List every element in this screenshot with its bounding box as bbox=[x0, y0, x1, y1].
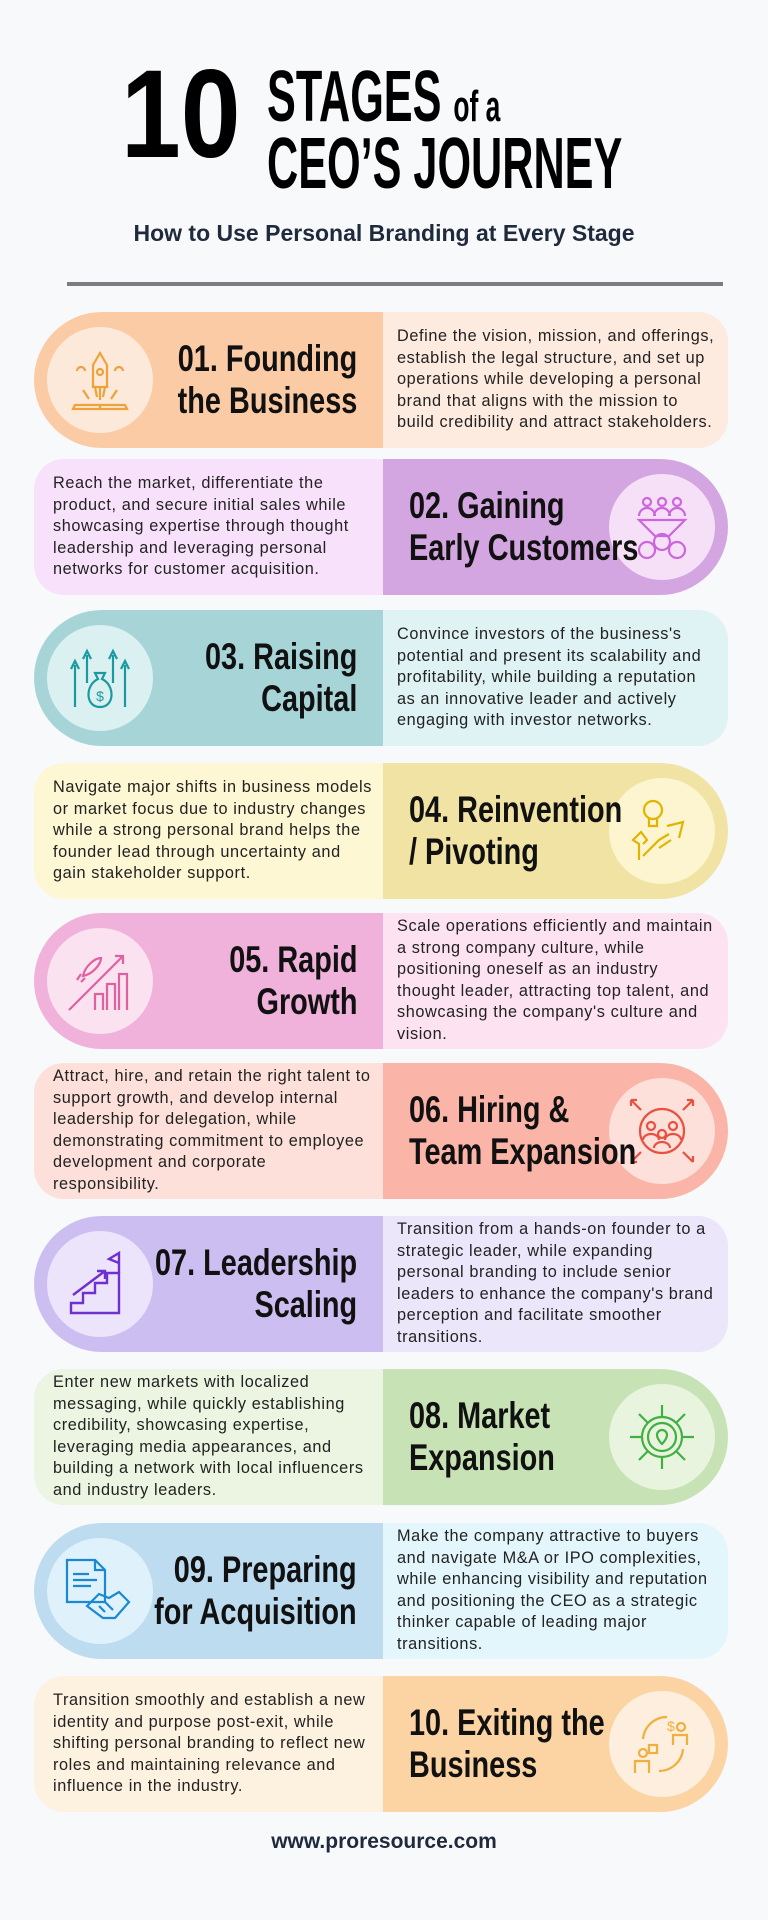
heading 07: Scaling bbox=[254, 1284, 357, 1325]
icon: rocket launch bbox=[47, 327, 153, 433]
heading 09: 09. Preparing bbox=[174, 1549, 357, 1590]
heading 10: 10. Exiting the bbox=[409, 1702, 605, 1743]
heading 05: Growth bbox=[256, 981, 357, 1022]
title line 1: STAGES of a bbox=[267, 57, 500, 137]
icon: exchange people: $ bbox=[667, 1718, 675, 1734]
text 07: Transition from a hands-on founder to a strategic leader, while expanding personal branding to include senior leaders to enhance the company's brand perception and facilitate smoother transitions. bbox=[397, 1220, 713, 1346]
panel: 05 rapid growth bbox=[34, 913, 728, 1049]
heading 05: 05. Rapid bbox=[229, 939, 357, 980]
heading 09: for Acquisition bbox=[154, 1591, 357, 1632]
panel: 04 reinvention bbox=[34, 763, 728, 899]
heading 01: 01. Founding bbox=[177, 338, 357, 379]
title number 10: 10 bbox=[121, 45, 241, 184]
icon: rocket growth chart bbox=[47, 928, 153, 1034]
icon: exchange people bbox=[609, 1691, 715, 1797]
panel: 03 raising capital bbox=[34, 610, 728, 746]
title bbox=[121, 45, 622, 204]
heading 06: Team Expansion bbox=[409, 1131, 636, 1172]
heading 02: Early Customers bbox=[409, 527, 638, 568]
heading 10: Business bbox=[409, 1744, 537, 1785]
heading 04 bbox=[409, 789, 622, 872]
title line 2: CEO’S JOURNEY bbox=[267, 124, 622, 204]
heading 09 bbox=[154, 1549, 357, 1632]
heading 01: the Business bbox=[177, 380, 357, 421]
subtitle: How to Use Personal Branding at Every Stage bbox=[133, 220, 635, 246]
heading 06: 06. Hiring & bbox=[409, 1089, 569, 1130]
icon: team expansion bbox=[609, 1078, 715, 1184]
heading 04: / Pivoting bbox=[409, 831, 539, 872]
text 10: Transition smoothly and establish a new identity and purpose post-exit, while shifting personal branding to reflect new roles and maintaining relevance and influence in the industry. bbox=[53, 1691, 365, 1795]
panel: 01 founding bbox=[34, 312, 728, 448]
icon: document handshake bbox=[47, 1538, 153, 1644]
panel: 09 acquisition bbox=[34, 1523, 728, 1659]
panel: 02 early customers bbox=[34, 459, 728, 595]
text 05: Scale operations efficiently and maintain a strong company culture, while positioning oneself as an industry thought leader, attracting top talent, and showcasing the company's culture and vision. bbox=[397, 917, 713, 1043]
heading 07 bbox=[155, 1242, 357, 1325]
icon: customer funnel bbox=[609, 474, 715, 580]
text 03: Convince investors of the business's potential and present its scalability and profitability, while building a reputation as an innovative leader and actively engaging with investor networks. bbox=[397, 625, 701, 729]
heading 02: 02. Gaining bbox=[409, 485, 565, 526]
icon: money bag arrows bbox=[47, 625, 153, 731]
text 01: Define the vision, mission, and offerings, establish the legal structure, and set up operations while developing a personal brand that aligns with the mission to build credibility and attract stakeholders. bbox=[397, 327, 714, 431]
icon: bulb pivot bbox=[609, 778, 715, 884]
heading 10 bbox=[409, 1702, 605, 1785]
text 02: Reach the market, differentiate the product, and secure initial sales while showcasing expertise through thought leadership and leveraging personal networks for customer acquisition. bbox=[53, 474, 349, 578]
heading 08: 08. Market bbox=[409, 1395, 550, 1436]
heading 03: Capital bbox=[261, 678, 357, 719]
heading 03 bbox=[205, 636, 357, 719]
heading 07: 07. Leadership bbox=[155, 1242, 357, 1283]
icon: stairs flag bbox=[47, 1231, 153, 1337]
heading 01 bbox=[177, 338, 357, 421]
heading 05 bbox=[229, 939, 357, 1022]
icon: globe bbox=[609, 1384, 715, 1490]
panel: 08 market expansion bbox=[34, 1369, 728, 1505]
heading 06 bbox=[409, 1089, 636, 1172]
heading 03: 03. Raising bbox=[205, 636, 357, 677]
panel: 06 hiring bbox=[34, 1063, 728, 1199]
panel: 07 leadership bbox=[34, 1216, 728, 1352]
heading 02 bbox=[409, 485, 638, 568]
panel: 10 exiting bbox=[34, 1676, 728, 1812]
text 04: Navigate major shifts in business models or market focus due to industry changes while a strong personal brand helps the founder lead through uncertainty and gain stakeholder support. bbox=[53, 778, 372, 882]
footer url: www.proresource.com bbox=[271, 1830, 497, 1853]
icon: money bag arrows: $ bbox=[96, 688, 104, 704]
text 06: Attract, hire, and retain the right talent to support growth, and develop internal leadership for delegation, while demonstrating commitment to employee development and corporate responsibility. bbox=[53, 1067, 371, 1193]
heading 08: Expansion bbox=[409, 1437, 555, 1478]
heading 08 bbox=[409, 1395, 555, 1478]
text 08: Enter new markets with localized messaging, while quickly establishing credibility, showcasing expertise, leveraging media appearances, and building a network with local influencers and industry leaders. bbox=[53, 1373, 364, 1499]
text 09: Make the company attractive to buyers and navigate M&A or IPO complexities, while enhancing visibility and reputation and positioning the CEO as a strategic thinker capable of leading major transitions. bbox=[397, 1527, 708, 1653]
heading 04: 04. Reinvention bbox=[409, 789, 622, 830]
